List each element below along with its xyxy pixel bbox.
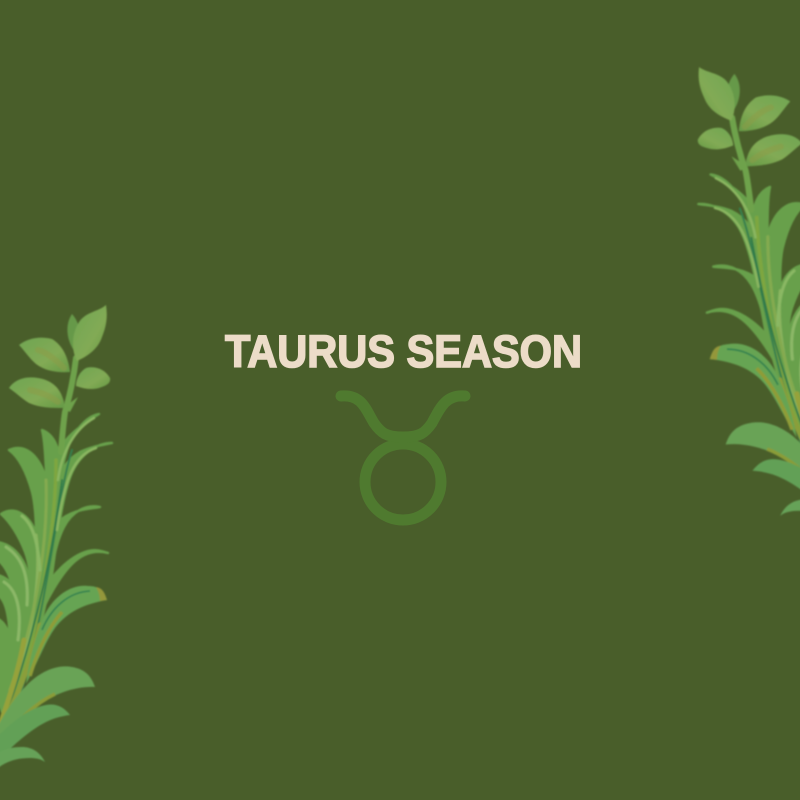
illustration: right plant [693, 61, 800, 526]
illustration: left plant [0, 305, 112, 768]
title: TAURUS SEASON [225, 326, 582, 377]
icon: Taurus zodiac symbol [341, 396, 465, 520]
